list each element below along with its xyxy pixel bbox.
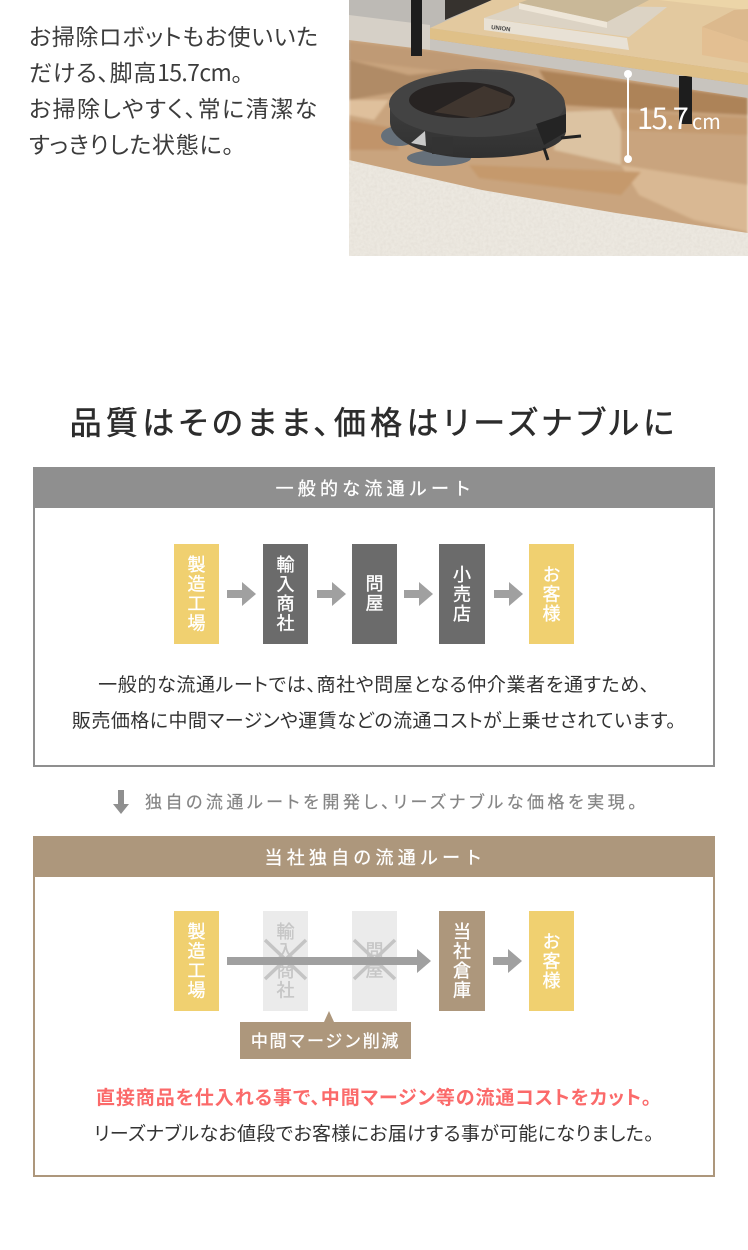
text block: robot vacuum clearance: すっきりした状態に。 (29, 126, 234, 160)
photo: robot vacuum under TV stand with 15.7cm height marker (349, 0, 748, 256)
note: original route developed: 独自の流通ルートを開発し、リーズナブルな価格を実現。 (145, 788, 640, 813)
panel header: own route: 当社独自の流通ルート (264, 844, 486, 870)
height marker: 15.7 (637, 96, 688, 138)
step: importer: 輸入商社 (272, 555, 298, 633)
shelf (430, 0, 748, 73)
wall (349, 0, 748, 60)
text: red highlight: 直接商品を仕入れる事で、中間マージン等の流通コストをカット。 (96, 1083, 652, 1110)
text block: general route description: 一般的な流通ルートでは、商社や問屋となる仲介業者を通すため、 (98, 670, 650, 697)
step: factory: 製造工場 (184, 922, 210, 1000)
panel header: general route (33, 467, 715, 508)
crosses and arrows (227, 938, 522, 980)
step: customer (529, 911, 574, 1011)
panel header: own route (33, 836, 715, 877)
step: importer removed (263, 911, 308, 1011)
rug (349, 160, 748, 256)
photo: robot vacuum under TV stand with 15.7cm height marker: UNION (491, 25, 511, 33)
step: wholesaler removed (352, 911, 397, 1011)
step: factory (174, 544, 219, 644)
panel: general distribution route (33, 467, 715, 767)
step: customer: お客様 (538, 565, 564, 623)
heading: 品質はそのまま、価格はリーズナブルに (70, 398, 678, 444)
box (702, 9, 748, 42)
text block: robot vacuum clearance: お掃除しやすく、常に清潔な (29, 90, 319, 124)
books (484, 5, 667, 37)
floor (349, 38, 748, 256)
flow: own route (174, 911, 574, 1059)
panel: own distribution route (33, 836, 715, 1177)
step: wholesaler: 問屋 (362, 574, 388, 614)
arrows (227, 582, 523, 606)
step: factory (174, 911, 219, 1011)
icon: down arrow (113, 790, 129, 814)
text block: general route description (72, 670, 676, 733)
step: customer (529, 544, 574, 644)
text: own route description: リーズナブルなお値段でお客様にお届けする事が可能になりました。 (94, 1119, 654, 1146)
callout pointer (324, 1011, 334, 1022)
height marker: cm (692, 106, 721, 135)
height marker (624, 70, 721, 163)
mops (381, 126, 417, 146)
step: retailer (439, 544, 485, 644)
callout: margin reduction: 中間マージン削減 (251, 1027, 400, 1052)
flow: general route (174, 544, 574, 644)
text block: general route description: 販売価格に中間マージンや運賃などの流通コストが上乗せされています。 (72, 706, 676, 733)
step: customer: お客様 (538, 932, 564, 990)
text block: robot vacuum clearance (29, 18, 319, 160)
step: own warehouse (439, 911, 485, 1011)
step: retailer: 小売店 (449, 565, 475, 623)
callout: margin reduction (240, 1022, 411, 1059)
robot (390, 69, 566, 158)
step: importer (263, 544, 308, 644)
legs (411, 0, 422, 56)
text block: robot vacuum clearance: お掃除ロボットもお使いいた (29, 18, 319, 52)
step: wholesaler removed: 問屋 (362, 941, 388, 981)
baseboard (349, 15, 430, 50)
step: wholesaler (352, 544, 397, 644)
step: importer removed: 輸入商社 (272, 922, 298, 1000)
text block: robot vacuum clearance: だける、脚高15.7cm。 (29, 54, 243, 88)
panel header: general route: 一般的な流通ルート (276, 475, 475, 501)
step: own warehouse: 当社倉庫 (449, 922, 475, 1000)
step: factory: 製造工場 (184, 555, 210, 633)
